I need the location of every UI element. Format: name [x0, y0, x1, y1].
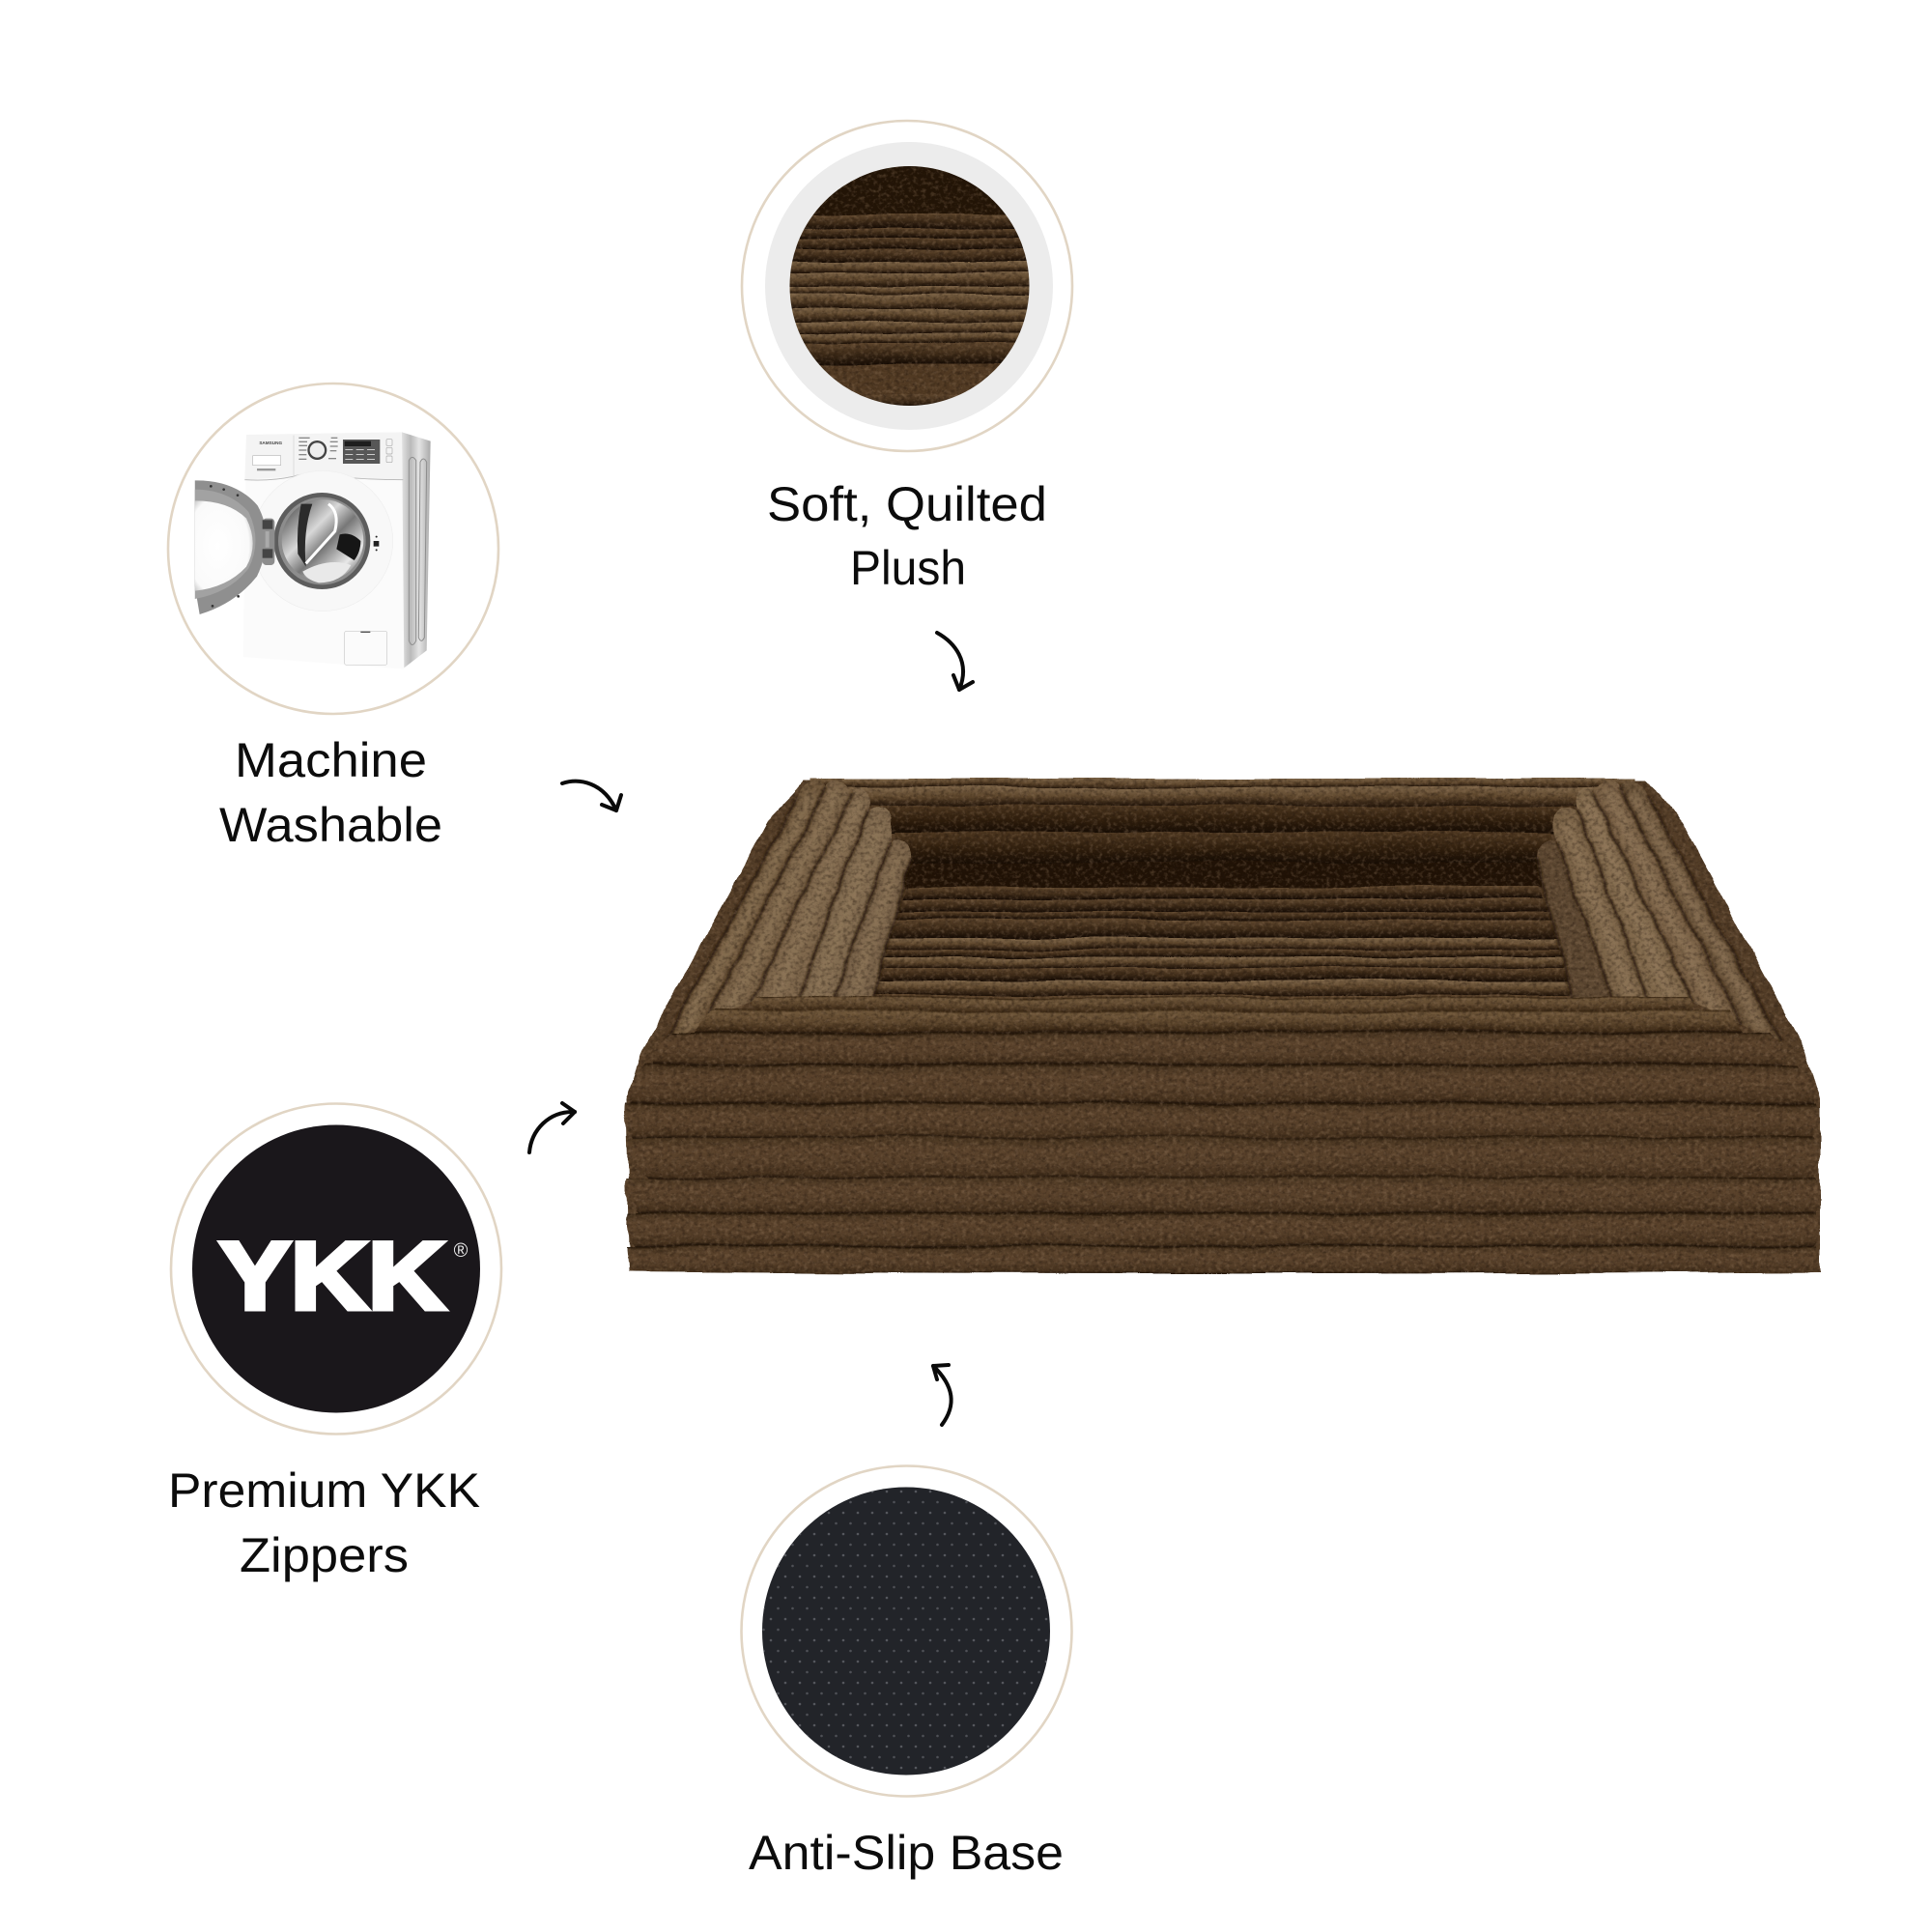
icon: washing machine: SAMSUNG	[259, 440, 283, 445]
heading: Soft, Quilted Plush: Soft, Quilted	[767, 477, 1047, 531]
panel: YKK zippers feature	[171, 1103, 501, 1434]
grey ring: plush	[765, 142, 1053, 430]
panel: machine washable feature	[168, 384, 498, 714]
left side rolls	[666, 781, 910, 1041]
dot texture: anti-slip grip	[762, 1488, 1050, 1776]
arrow: base to bed	[933, 1365, 952, 1425]
heading: Plush line two: Plush	[850, 541, 966, 595]
back rolls	[812, 779, 1634, 888]
floor stripes	[868, 887, 1577, 1005]
arrow: plush to bed	[937, 633, 973, 690]
logo disc: YKK	[192, 1124, 480, 1412]
right side rolls	[1536, 781, 1780, 1041]
product: brown quilted plush bed	[623, 779, 1820, 1273]
heading: Premium YKK: Premium YKK	[168, 1463, 480, 1518]
fabric swatch: brown quilted plush	[790, 166, 1030, 406]
material swatch: black base	[762, 1488, 1050, 1776]
front stacked rolls	[623, 997, 1819, 1273]
arrow: zipper to bed	[529, 1103, 575, 1152]
bed silhouette	[626, 781, 1820, 1273]
circle outline: base	[742, 1466, 1072, 1797]
heading: Machine Washable: Machine	[235, 733, 427, 787]
registered mark: ®	[454, 1240, 469, 1262]
circle outline: plush	[742, 121, 1072, 451]
arrow: washable to bed	[562, 781, 621, 810]
panel: anti-slip base feature	[742, 1466, 1072, 1797]
icon: washing machine	[195, 432, 431, 669]
circle outline: YKK	[171, 1103, 501, 1434]
heading: Zippers line two: Zippers	[240, 1528, 409, 1582]
heading: Anti-Slip Base: Anti-Slip Base	[749, 1826, 1064, 1880]
circle outline: washer	[168, 384, 498, 714]
panel: soft quilted plush feature	[742, 121, 1072, 451]
heading: Washable line two: Washable	[219, 798, 442, 852]
logo wordmark: YKK: YKK	[219, 1222, 445, 1329]
